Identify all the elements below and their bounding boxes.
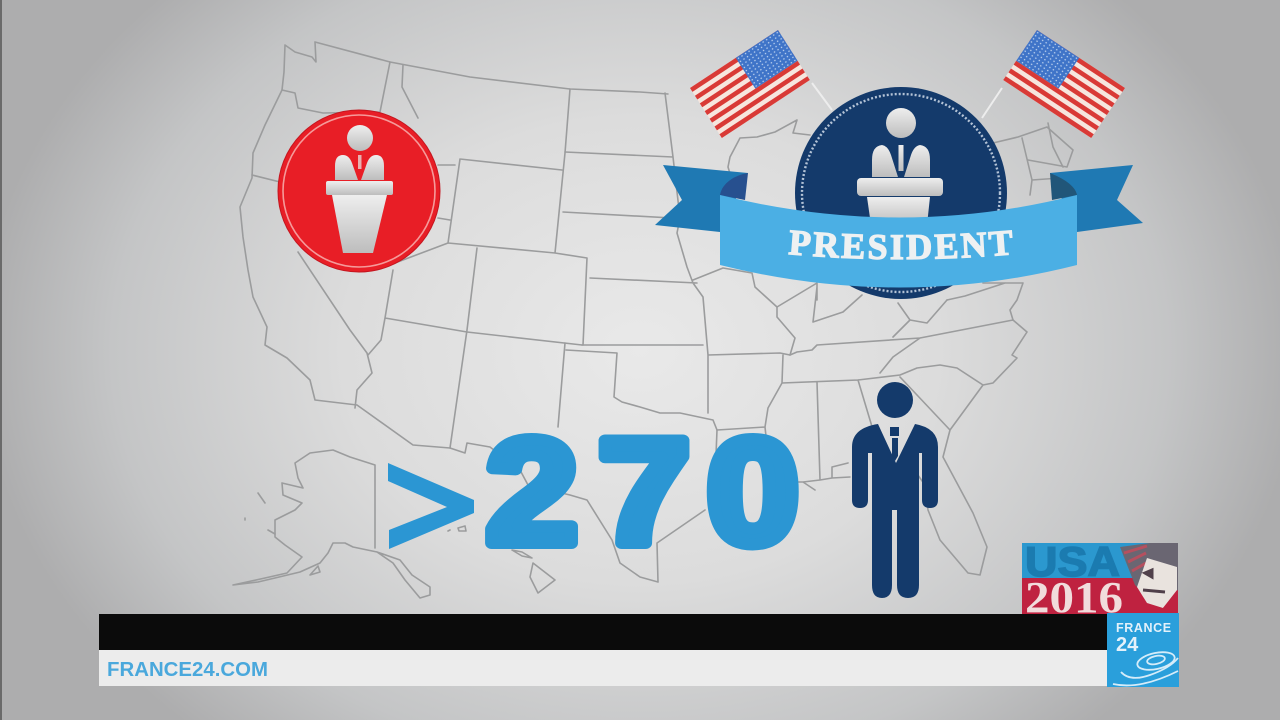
Alaska [233, 450, 430, 598]
url bar [99, 650, 1107, 686]
number 270: 2 [486, 410, 578, 575]
southern states [717, 320, 1027, 575]
navy disc [795, 87, 1007, 299]
logo top panel [1022, 543, 1178, 579]
ribbon front [720, 195, 1077, 288]
western states [252, 62, 587, 448]
greater-than sign [388, 463, 474, 549]
ribbon right tail [1050, 165, 1143, 232]
podium speaker icon [326, 125, 393, 253]
islands [245, 493, 555, 593]
man in suit icon [852, 382, 938, 598]
left edge [0, 0, 2, 720]
logo bottom panel [1022, 578, 1178, 614]
tie [890, 427, 899, 461]
president badge [655, 30, 1143, 299]
news ticker black bar [99, 614, 1107, 650]
france label: FRANCE [1116, 621, 1172, 635]
northeastern states [947, 123, 1073, 320]
statue of liberty head [1120, 543, 1178, 613]
number 270: 7 [598, 410, 690, 575]
ribbon left tail [655, 165, 748, 232]
france 24 logo [1107, 613, 1179, 687]
ribbon right fold [1050, 173, 1077, 200]
american flag right [1003, 30, 1125, 138]
wave rings [1113, 649, 1178, 685]
flag pole left [812, 83, 832, 110]
dotted ring [802, 94, 1000, 292]
head [877, 382, 913, 418]
map of the United States [233, 42, 1073, 598]
number 270: 0 [707, 410, 799, 575]
upper midwest and lakes [728, 120, 947, 337]
usa 2016 logo [1022, 538, 1178, 622]
red candidate badge [278, 110, 440, 272]
badge stitched ring [283, 115, 435, 267]
logo square [1107, 613, 1179, 687]
usa label: USA [1025, 538, 1120, 585]
ribbon left fold [720, 173, 748, 200]
24 label: 24 [1116, 634, 1139, 656]
american flag left [690, 30, 810, 138]
northern border and Pacific coast [240, 42, 705, 582]
body [852, 424, 938, 598]
more than 270 figure [388, 410, 799, 575]
podium speaker icon [857, 108, 943, 225]
badge disc [278, 110, 440, 272]
plains states [558, 93, 795, 480]
url label: FRANCE24.COM [107, 659, 268, 681]
president label: PRESIDENT [788, 230, 1013, 260]
year label: 2016 [1025, 573, 1123, 622]
flag pole right [982, 88, 1002, 118]
